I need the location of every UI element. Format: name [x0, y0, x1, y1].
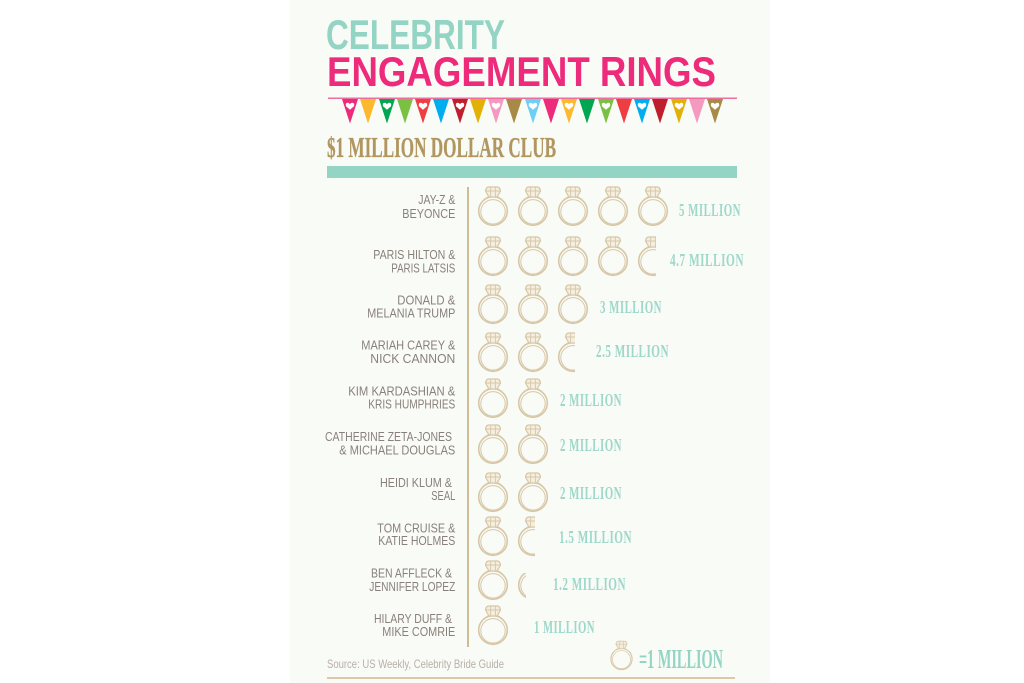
row: Mariah Carey and Nick Cannon: NICK CANNON [370, 351, 455, 366]
row: Jay-Z and Beyonce: BEYONCE [402, 206, 456, 221]
row: Paris Hilton and Paris Latsis [373, 237, 744, 276]
row: Kim Kardashian and Kris Humphries [348, 379, 622, 417]
row: Heidi Klum and Seal: 2 MILLION [560, 483, 622, 503]
row: Hilary Duff and Mike Comrie: 1 MILLION [534, 617, 595, 637]
row: Catherine Zeta-Jones and Michael Douglas: & MICHAEL DOUGLAS [339, 442, 456, 458]
title: ENGAGEMENT RINGS [327, 48, 716, 95]
row: Jay-Z and Beyonce: JAY-Z & [418, 192, 456, 207]
row: Jay-Z and Beyonce: 5 MILLION [679, 200, 741, 220]
source note: Source: US Weekly, Celebrity Bride Guide [327, 657, 504, 671]
row: Mariah Carey and Nick Cannon: 2.5 MILLION [596, 341, 669, 361]
legend [611, 641, 723, 674]
row: Kim Kardashian and Kris Humphries: 2 MILLION [560, 390, 622, 410]
bunting banner [328, 98, 737, 124]
row: Catherine Zeta-Jones and Michael Douglas: CATHERINE ZETA-JONES [325, 429, 452, 444]
row: Kim Kardashian and Kris Humphries: KIM KARDASHIAN & [348, 384, 456, 398]
row: Paris Hilton and Paris Latsis: PARIS HILTON & [373, 247, 456, 262]
row: Heidi Klum and Seal: SEAL [431, 488, 455, 503]
row: Tom Cruise and Katie Holmes [377, 517, 632, 555]
row: Hilary Duff and Mike Comrie: HILARY DUFF & [374, 611, 452, 626]
row: Hilary Duff and Mike Comrie: MIKE COMRIE [382, 624, 456, 639]
bottom rule [327, 677, 735, 679]
row: Kim Kardashian and Kris Humphries: KRIS HUMPHRIES [368, 397, 456, 412]
row: Catherine Zeta-Jones and Michael Douglas: 2 MILLION [560, 435, 622, 455]
row: Donald and Melania Trump: 3 MILLION [600, 297, 662, 317]
row: Ben Affleck and Jennifer Lopez: JENNIFER LOPEZ [369, 579, 455, 594]
row: Donald and Melania Trump: DONALD & [397, 292, 456, 308]
row: Tom Cruise and Katie Holmes: TOM CRUISE & [377, 520, 456, 535]
row: Tom Cruise and Katie Holmes: KATIE HOLMES [378, 533, 456, 548]
row: Tom Cruise and Katie Holmes: 1.5 MILLION [559, 527, 632, 547]
legend: =1 MILLION [639, 644, 723, 674]
row: Ben Affleck and Jennifer Lopez: 1.2 MILLION [553, 574, 626, 594]
row: Paris Hilton and Paris Latsis: 4.7 MILLION [670, 250, 744, 270]
row: Mariah Carey and Nick Cannon [361, 333, 669, 371]
row: Ben Affleck and Jennifer Lopez [369, 561, 626, 599]
row: Heidi Klum and Seal: HEIDI KLUM & [380, 475, 452, 490]
subheading: $1 MILLION DOLLAR CLUB [327, 132, 556, 164]
title: CELEBRITY [326, 11, 505, 58]
row: Hilary Duff and Mike Comrie [374, 606, 595, 644]
row: Catherine Zeta-Jones and Michael Douglas [325, 425, 622, 463]
row: Jay-Z and Beyonce [402, 187, 741, 225]
row: Heidi Klum and Seal [380, 473, 622, 511]
row: Mariah Carey and Nick Cannon: MARIAH CAREY & [361, 338, 456, 352]
row: Donald and Melania Trump: MELANIA TRUMP [367, 306, 455, 320]
heading bar [327, 166, 737, 178]
row: Donald and Melania Trump [367, 285, 662, 323]
background panel [290, 0, 770, 683]
row: Ben Affleck and Jennifer Lopez: BEN AFFLECK & [371, 566, 452, 581]
axis line [467, 187, 469, 647]
title [326, 11, 716, 95]
row: Paris Hilton and Paris Latsis: PARIS LATSIS [391, 260, 456, 276]
